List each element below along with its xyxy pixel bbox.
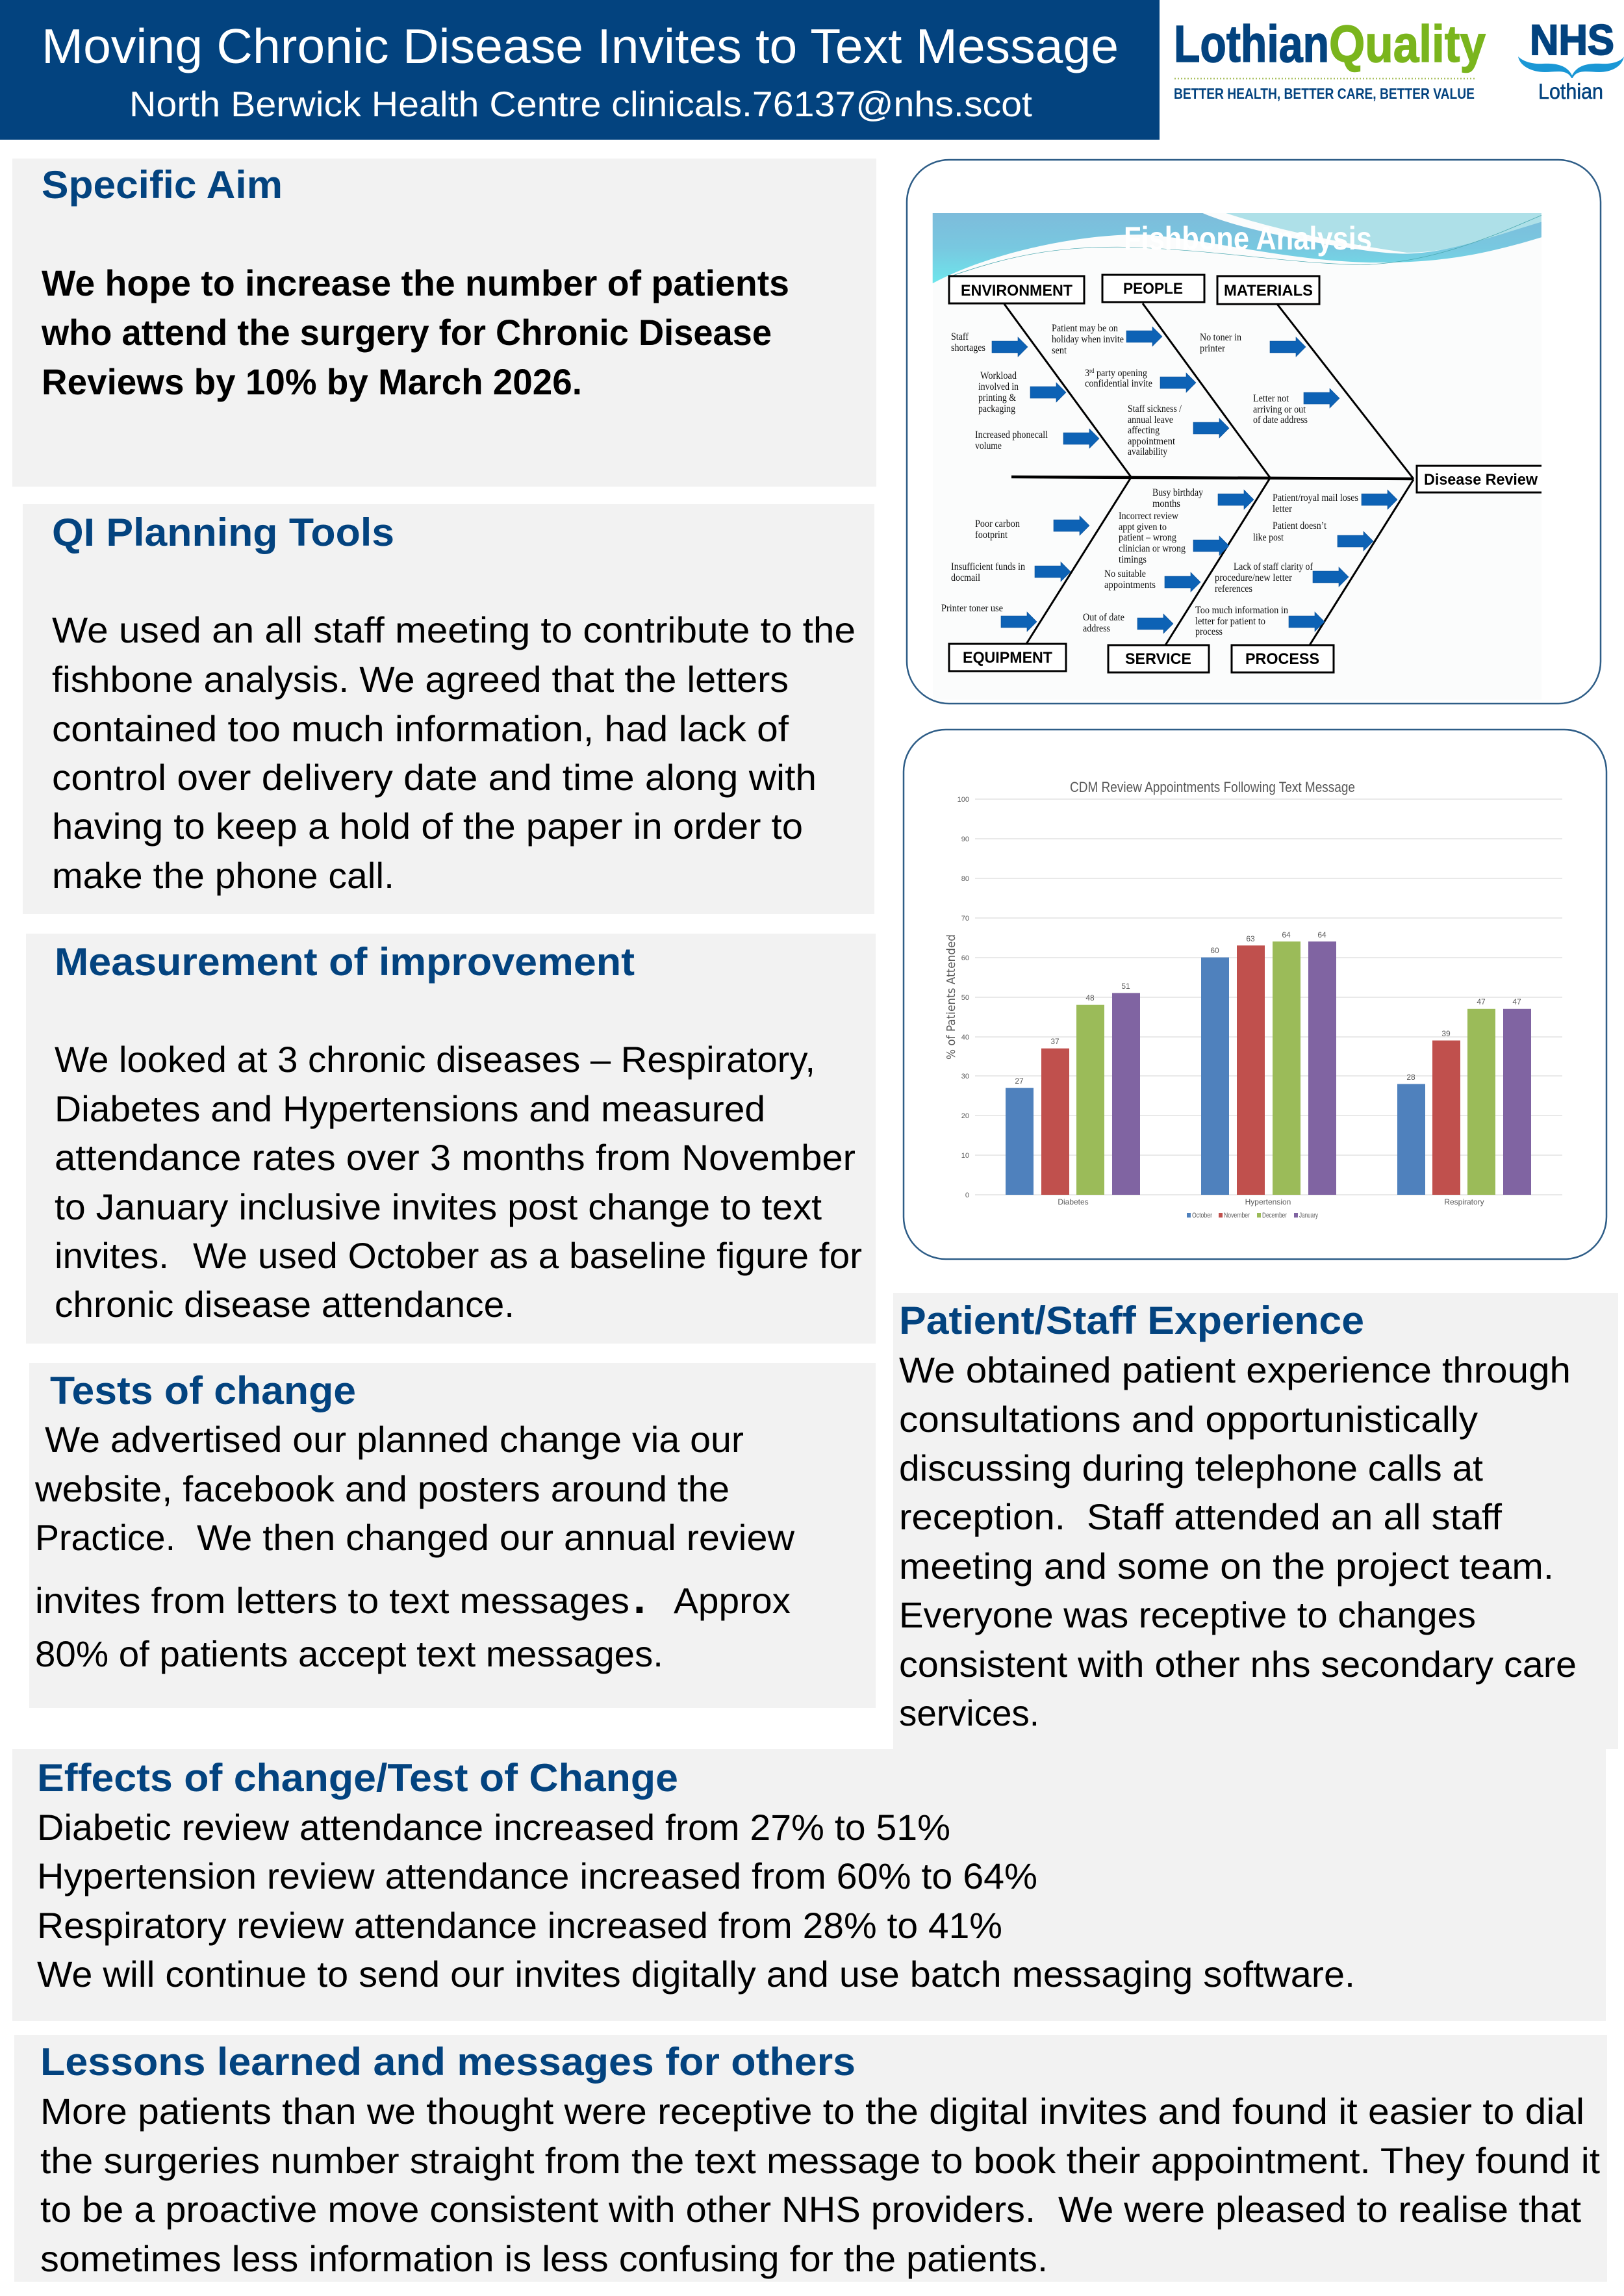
text block: measurement description [55,1039,862,1325]
cause labels: appt given to [1119,522,1167,533]
heading: specific aim: Specific Aim [42,163,283,207]
text block: measurement description: We used October as a baseline figure for [193,1235,862,1276]
panel: lessons learned [14,2035,1607,2282]
subtitle: North Berwick Health Centre clinicals.76137@nhs.scot [129,84,1032,124]
text block: measurement description: attendance rates over 3 months from November [55,1137,856,1178]
data labels: 51 [1121,982,1130,991]
y axis tick labels: 100 [958,796,969,804]
text block: effects results: Respiratory review attendance increased from 28% to 41% [37,1905,1002,1946]
cause labels: Workload [980,370,1017,381]
data labels: 63 [1246,934,1255,943]
panel: effects of change [12,1749,1606,2021]
cause labels: references [1215,583,1252,594]
cause labels: letter for patient to [1195,616,1265,627]
logo: NHS Lothian: NHS [1530,16,1614,64]
cause labels: Printer toner use [941,603,1003,614]
cause labels: Letter not [1253,393,1289,404]
y axis tick labels: 40 [961,1034,969,1041]
cause labels: clinician or wrong [1119,543,1186,554]
text block: QI planning description: We used an all staff meeting to contribute to the [52,609,856,650]
y axis tick labels: 20 [961,1112,969,1120]
text block: effects results: Hypertension review attendance increased from 60% to 64% [37,1856,1037,1896]
category labels [1058,1197,1484,1206]
chart title: CDM Review Appointments Following Text Message [1070,779,1355,795]
bars: respiratory [1397,1009,1531,1195]
data labels: 47 [1512,997,1521,1006]
text block: tests of change description: Approx [674,1580,791,1621]
cause arrows [992,327,1397,633]
text block: lessons description [40,2091,1600,2279]
cause labels: Lack of staff clarity of [1234,561,1313,572]
panel: QI planning tools [23,504,874,914]
logo: NHS Lothian [1518,16,1624,103]
data labels: 28 [1406,1073,1415,1082]
text block: effects results: Diabetic review attendance increased from 27% to 51% [37,1807,950,1848]
category labels: SERVICE [1125,650,1191,668]
text block: lessons description: to be a proactive move consistent with other NHS providers. [40,2189,1035,2230]
cause labels: timings [1119,554,1147,565]
text block: QI planning description: control over delivery date and time along with [52,757,817,798]
text block: QI planning description: fishbone analysis. We agreed that the letters [52,659,789,700]
y axis tick labels: 70 [961,915,969,923]
category labels [961,280,1538,668]
text block: lessons description: We were pleased to realise that [1058,2189,1581,2230]
data labels: 27 [1015,1077,1024,1086]
cause labels: footprint [975,529,1008,541]
text block: tests of change description: We advertised our planned change via our [45,1419,744,1460]
text block: experience description: Staff attended an all staff [1087,1496,1502,1537]
y axis tick labels: 0 [965,1192,969,1199]
text block: experience description: services. [899,1692,1039,1733]
cause labels: shortages [951,342,985,353]
cause labels: appointment [1128,436,1176,447]
data labels: 37 [1050,1037,1059,1046]
cause labels: of date address [1253,415,1308,426]
logo: Lothian Quality [1174,15,1486,102]
text block: QI planning description: having to keep a hold of the paper in order to [52,806,803,847]
text block: experience description: We obtained patient experience through [899,1349,1571,1390]
data labels: 39 [1441,1029,1451,1038]
text block: tests of change description: website, facebook and posters around the [34,1468,730,1509]
text block: aim statement: We hope to increase the number of patients [42,262,789,303]
cause labels: printing & [978,392,1016,403]
logo: Lothian Quality: Lothian [1174,15,1329,73]
text block: QI planning description: make the phone call. [52,855,394,896]
data labels: 48 [1085,993,1095,1002]
y axis tick labels: 50 [961,994,969,1002]
category labels: Diabetes [1058,1197,1089,1206]
cause labels: No toner in [1200,332,1241,343]
category labels: PROCESS [1245,650,1319,668]
cause labels: affecting [1128,425,1160,436]
chart legend: October [1192,1212,1212,1219]
text block: experience description: Everyone was receptive to changes [899,1594,1476,1635]
cause labels: No suitable [1104,568,1146,580]
text block: experience description: consultations and opportunistically [899,1399,1478,1440]
y axis tick labels: 30 [961,1073,969,1080]
y axis tick labels: 90 [961,835,969,843]
cause labels: like post [1253,532,1284,543]
text block: experience description [899,1349,1577,1733]
header banner [0,0,1160,140]
text block: experience description: discussing during telephone calls at [899,1448,1483,1488]
category boxes [949,275,1542,672]
cause labels: annual leave [1128,415,1173,426]
cause labels: letter [1273,504,1293,515]
cause labels: 3 [1085,368,1090,379]
data labels: 60 [1210,946,1219,955]
category labels: MATERIALS [1224,282,1313,300]
cause labels: months [1152,498,1180,509]
text block: experience description: reception. [899,1496,1065,1537]
cause labels: Out of date [1083,612,1124,623]
data labels: 64 [1282,930,1291,939]
cause labels: Busy birthday [1152,487,1203,498]
text block: measurement description: chronic disease attendance. [55,1284,514,1325]
text block: aim statement [41,262,789,402]
panel: tests of change [29,1363,876,1708]
text block: tests of change description: 80% of patients accept text messages. [35,1633,663,1674]
bars: hypertension [1201,941,1336,1195]
text block: QI planning description: contained too much information, had lack of [52,708,789,749]
cause labels: docmail [951,572,980,583]
text block: lessons description: sometimes less information is less confusing for the patients. [40,2238,1048,2279]
cause labels: Patient/royal mail loses [1273,492,1358,504]
text block: experience description: meeting and some on the project team. [899,1546,1554,1587]
cause labels: address [1083,623,1110,634]
cause labels: Insufficient funds in [951,561,1025,572]
y axis tick labels: 80 [961,875,969,883]
cause labels: Increased phonecall [975,429,1048,440]
cause labels: packaging [978,403,1015,415]
cause labels: sent [1052,345,1067,356]
title: Moving Chronic Disease Invites to Text Message [42,19,1119,73]
cause labels: Poor carbon [975,518,1020,529]
data labels [1015,930,1521,1086]
y axis tick labels [958,796,969,1199]
cause labels: Too much information in [1195,605,1288,616]
text block: tests of change description [34,1419,795,1674]
fishbone heading: Fishbone Analysis [1124,220,1372,257]
cause labels: confidential invite [1085,378,1152,389]
bars: diabetes [1006,993,1140,1195]
data labels: 47 [1477,997,1486,1006]
cause labels: printer [1200,343,1226,354]
panel: measurement of improvement [26,934,876,1344]
category labels: PEOPLE [1123,280,1183,298]
y axis title: % of Patients Attended [945,934,958,1060]
text block: lessons description: More patients than we thought were receptive to the digital invites and found it easier to dial [40,2091,1584,2132]
chart legend: January [1299,1212,1318,1219]
text block: QI planning description [52,609,856,896]
cause labels: involved in [978,381,1019,392]
y axis tick labels: 10 [961,1152,969,1160]
cause labels [941,323,1358,637]
category labels: Disease Review [1424,471,1538,489]
fishbone banner graphic [933,213,1542,283]
text block: measurement description: We looked at 3 chronic diseases – Respiratory, [55,1039,815,1080]
cause labels: party opening [1094,368,1147,379]
cause labels: Staff sickness / [1128,403,1182,415]
heading: patient/staff experience: Patient/Staff Experience [899,1299,1364,1342]
heading: lessons learned: Lessons learned and messages for others [40,2040,856,2084]
cause labels: availability [1128,446,1167,457]
logo: Lothian Quality: BETTER HEALTH, BETTER CARE, BETTER VALUE [1174,85,1475,102]
text block: effects results: We will continue to send our invites digitally and use batch messaging software. [37,1954,1355,1995]
category labels: Respiratory [1444,1197,1484,1206]
cause labels: Patient may be on [1052,323,1118,334]
fishbone skeleton lines [1004,303,1414,645]
y axis tick labels: 60 [961,954,969,962]
cause labels: Patient doesn’t [1273,520,1326,531]
chart legend [1187,1212,1318,1219]
data labels: 64 [1317,930,1326,939]
cause labels: procedure/new letter [1215,572,1293,583]
panel: specific aim [12,159,876,487]
cause labels: appointments [1104,580,1156,591]
heading: tests of change: Tests of change [50,1369,356,1412]
heading: measurement of improvement: Measurement of improvement [55,940,635,984]
text block: effects results [37,1807,1355,1995]
text block: measurement description: invites. [55,1235,169,1276]
panel: patient/staff experience [893,1293,1618,1749]
heading: effects of change: Effects of change/Test of Change [37,1756,678,1800]
cause labels: arriving or out [1253,404,1306,415]
cause labels: holiday when invite [1052,334,1124,345]
text block: tests of change description: We then changed our annual review [197,1517,795,1558]
text block: tests of change description: invites from letters to text messages [35,1580,629,1621]
cause labels: patient – wrong [1119,532,1176,543]
text block: measurement description: to January inclusive invites post change to text [55,1186,822,1227]
panel: fishbone analysis diagram [907,160,1601,704]
logo: Lothian Quality: Quality [1329,15,1486,73]
logo: NHS Lothian: Lothian [1538,79,1603,103]
cause labels: Staff [951,331,969,342]
chart legend: December [1262,1212,1287,1219]
category labels: Hypertension [1245,1197,1291,1206]
category labels: EQUIPMENT [963,649,1052,667]
text block: tests of change description: . [633,1574,646,1623]
cause labels: rd [1089,368,1094,375]
category labels: ENVIRONMENT [961,282,1072,300]
cause labels: Incorrect review [1119,511,1178,522]
text block: aim statement: who attend the surgery for Chronic Disease [41,312,772,353]
cause labels: process [1195,626,1223,637]
panel: attendance bar chart [904,730,1606,1259]
text block: experience description: consistent with other nhs secondary care [899,1644,1577,1685]
text block: aim statement: Reviews by 10% by March 2026. [42,361,582,402]
text block: lessons description: the surgeries number straight from the text message to book their appointment. They found it [40,2140,1600,2181]
heading: QI planning tools: QI Planning Tools [52,511,394,554]
text block: tests of change description: Practice. [35,1517,175,1558]
cause labels: volume [975,440,1002,452]
text block: measurement description: Diabetes and Hypertensions and measured [55,1088,765,1129]
chart legend: November [1224,1212,1250,1219]
